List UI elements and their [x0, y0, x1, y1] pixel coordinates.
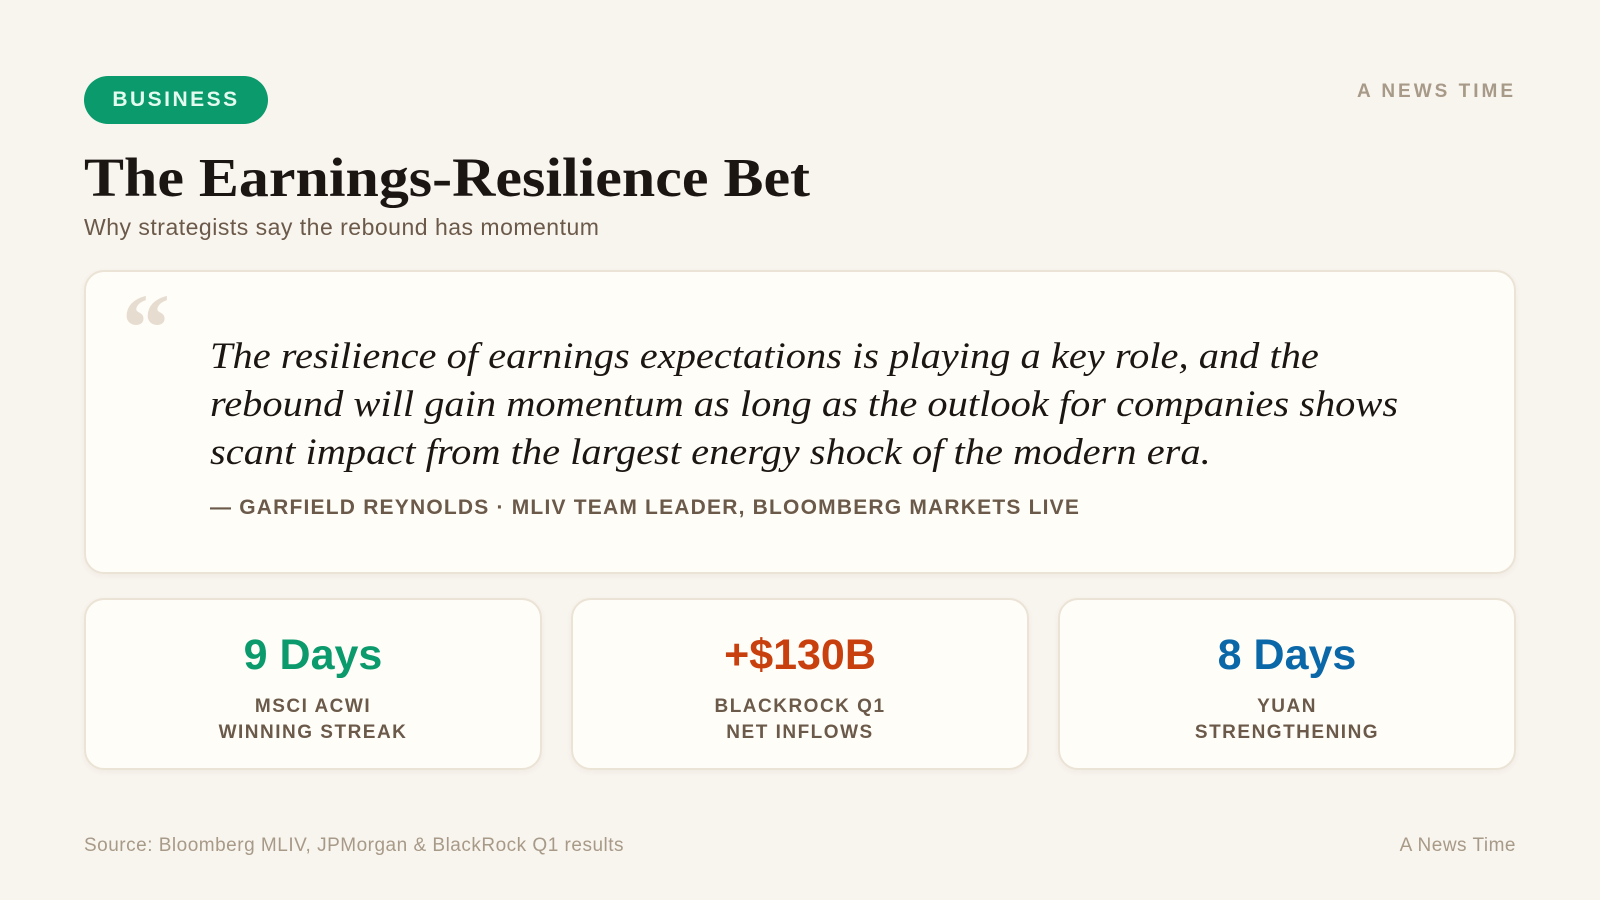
value: 9 Days — [244, 631, 382, 679]
stat card: +$130B — [571, 598, 1029, 770]
value: 8 Days — [1218, 631, 1356, 679]
label — [1195, 696, 1379, 743]
label: MSCI ACWI — [255, 696, 371, 717]
label: STRENGTHENING — [1195, 722, 1379, 743]
panel: quote — [84, 270, 1516, 574]
quote text — [210, 336, 1398, 473]
brand label: A NEWS TIME — [1357, 81, 1516, 102]
label — [714, 696, 886, 743]
stat card: 8 days — [1058, 598, 1516, 770]
label: WINNING STREAK — [219, 722, 407, 743]
footer: source: Source: Bloomberg MLIV, JPMorgan & BlackRock Q1 results — [84, 835, 624, 856]
title: The Earnings-Resilience Bet — [84, 147, 810, 208]
quote text: The resilience of earnings expectations is playing a key role, and the — [210, 336, 1319, 377]
value: +$130B — [724, 631, 876, 679]
subtitle: Why strategists say the rebound has momentum — [84, 214, 599, 240]
badge: business — [84, 76, 268, 124]
label: BLACKROCK Q1 — [714, 696, 886, 717]
stat card: 9 days — [84, 598, 542, 770]
label: YUAN — [1257, 696, 1317, 717]
icon: quote mark: “ — [122, 274, 170, 381]
badge: business: BUSINESS — [112, 88, 240, 111]
label: NET INFLOWS — [726, 722, 874, 743]
footer: brand: A News Time — [1400, 835, 1516, 856]
label — [218, 696, 407, 743]
quote text: rebound will gain momentum as long as the outlook for companies shows — [210, 384, 1398, 425]
attribution: — GARFIELD REYNOLDS · MLIV TEAM LEADER, BLOOMBERG MARKETS LIVE — [210, 496, 1080, 519]
quote text: scant impact from the largest energy shock of the modern era. — [210, 432, 1211, 473]
